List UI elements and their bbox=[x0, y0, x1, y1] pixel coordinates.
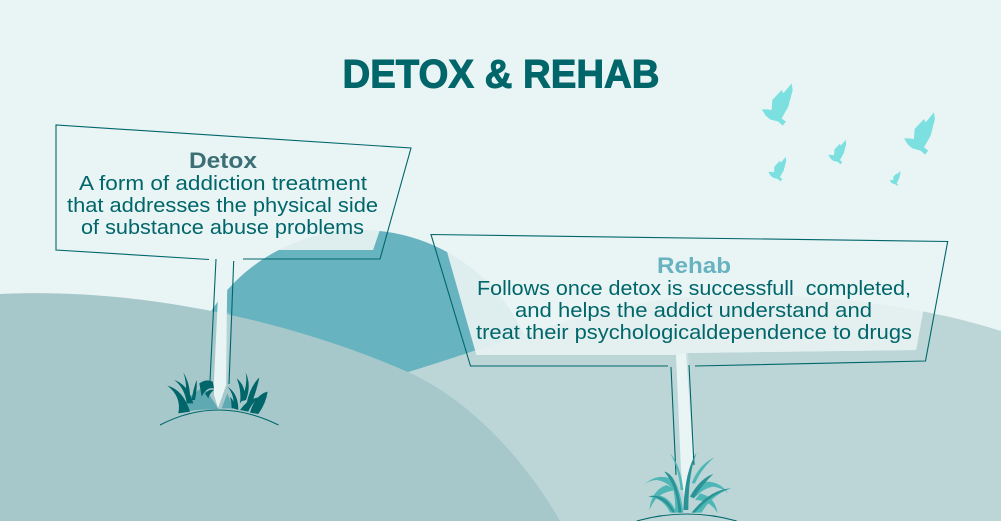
bird 4 bbox=[768, 157, 786, 181]
rehab sign outline bbox=[431, 234, 948, 475]
detox grass bbox=[167, 372, 268, 414]
detox text block bbox=[67, 148, 378, 239]
detox sign backing bbox=[56, 125, 411, 408]
birds bbox=[762, 83, 935, 186]
detox heading: Detox bbox=[189, 148, 258, 173]
detox post shade bbox=[223, 312, 231, 396]
detox sign outline bbox=[56, 125, 411, 384]
middle hill bbox=[182, 230, 540, 521]
rehab heading: Rehab bbox=[657, 253, 731, 278]
detox body: of substance abuse problems bbox=[81, 217, 364, 239]
detox body: A form of addiction treatment bbox=[79, 173, 367, 195]
right hill bbox=[395, 295, 1001, 521]
detox mound bbox=[160, 410, 278, 425]
rehab mound bbox=[637, 514, 737, 521]
rehab sign faint hill overlay bbox=[447, 252, 524, 350]
rehab sign backing bbox=[442, 234, 948, 497]
front hill bbox=[0, 293, 560, 521]
detox body: that addresses the physical side bbox=[67, 195, 378, 217]
rehab body: Follows once detox is successfull completed, bbox=[477, 278, 911, 300]
rehab text block bbox=[476, 253, 912, 344]
rehab post shade bbox=[686, 353, 695, 455]
bird 2 bbox=[904, 112, 935, 155]
rehab body: and helps the addict understand and bbox=[515, 300, 872, 322]
bird 3 bbox=[828, 140, 846, 164]
detox sign faint hill overlay bbox=[280, 230, 380, 250]
rehab grass bbox=[643, 453, 731, 513]
rehab body: treat their psychologicaldependence to drugs bbox=[476, 322, 912, 344]
detox body bbox=[67, 173, 378, 239]
rehab sign faint right hill overlay bbox=[702, 314, 923, 353]
bird 5 bbox=[890, 171, 900, 186]
title: DETOX & REHAB bbox=[342, 52, 660, 96]
bird 1 bbox=[762, 83, 793, 126]
rehab body bbox=[476, 278, 912, 344]
